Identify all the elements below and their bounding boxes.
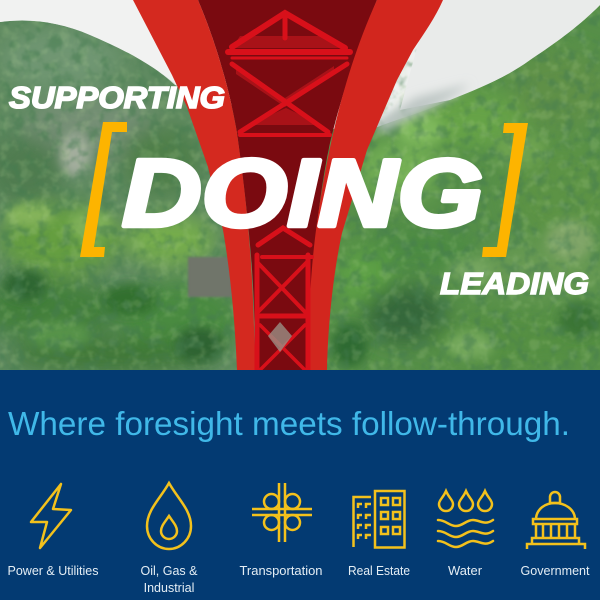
label: power: Power & Utilities — [8, 564, 98, 578]
foliage masses — [0, 30, 600, 371]
foliage detail — [3, 114, 600, 367]
sky patches restored over texture — [0, 0, 180, 88]
right hillside — [300, 5, 600, 370]
label: real estate: Real Estate — [348, 564, 410, 578]
label: oil gas industrial: Oil, Gas & — [141, 564, 198, 578]
labels — [8, 564, 590, 595]
truss members — [228, 13, 350, 370]
mist on right ridge — [372, 84, 470, 132]
tagline: Where foresight meets follow-through. — [8, 405, 570, 442]
label: water: Water — [448, 564, 482, 578]
left mountain — [0, 20, 254, 370]
left bracket — [80, 122, 127, 257]
bottom panel — [0, 370, 600, 600]
right bracket — [482, 123, 528, 257]
sky — [0, 0, 600, 130]
icon: transportation interchange — [252, 483, 312, 542]
icon: oil drop — [147, 483, 191, 549]
heading: LEADING: LEADING — [440, 266, 589, 301]
distant misty mountain — [377, 108, 400, 127]
heading: DOING: DOING — [122, 140, 483, 247]
hero photo — [0, 0, 600, 371]
truss panels — [232, 36, 345, 125]
sky seen through lower truss — [268, 322, 292, 352]
heading: SUPPORTING: SUPPORTING — [9, 80, 225, 115]
label: oil gas industrial: Industrial — [144, 581, 194, 595]
foliage texture light — [0, 0, 600, 370]
bridge — [133, 0, 443, 370]
right arch — [308, 0, 443, 370]
label: transportation: Transportation — [240, 564, 323, 578]
concrete pier behind bridge — [188, 257, 232, 297]
icon: lightning bolt — [31, 484, 71, 548]
icon: buildings — [354, 491, 404, 548]
icon: water — [438, 491, 493, 547]
icon: capitol — [527, 491, 585, 549]
label: government: Government — [520, 564, 590, 578]
left arch — [133, 0, 255, 370]
truss backing — [198, 0, 377, 370]
foliage texture dark — [0, 0, 600, 370]
